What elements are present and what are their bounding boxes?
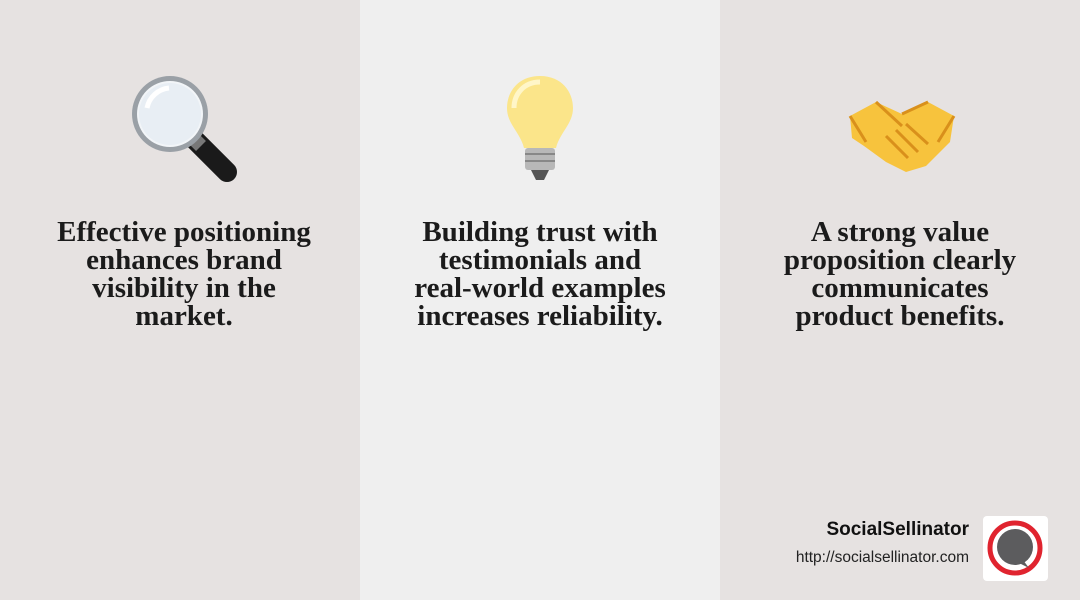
heading: left: market. [135,300,233,332]
heading: right [784,216,1016,332]
heading: right: proposition clearly [784,244,1016,276]
heading: middle: increases reliability. [417,300,663,332]
icon: magnifying glass [132,76,237,182]
panel: right [720,0,1080,600]
heading: left: enhances brand [86,244,282,276]
heading: left: visibility in the [92,272,276,304]
logo [983,516,1048,581]
icon: light bulb [507,76,573,180]
heading: middle: real-world examples [414,272,666,304]
panel: middle [360,0,720,600]
panel: left [0,0,360,600]
heading: left [57,216,311,332]
icon: handshake [848,100,956,172]
brand name: SocialSellinator [826,519,969,540]
heading: middle: testimonials and [439,244,641,276]
brand footer [796,516,1048,581]
heading: right: A strong value [811,216,989,248]
brand url: http://socialsellinator.com [796,549,969,566]
heading: right: product benefits. [796,300,1004,332]
heading: right: communicates [811,272,989,304]
heading: middle: Building trust with [422,216,658,248]
heading: left: Effective positioning [57,216,311,248]
heading: middle [414,216,666,332]
